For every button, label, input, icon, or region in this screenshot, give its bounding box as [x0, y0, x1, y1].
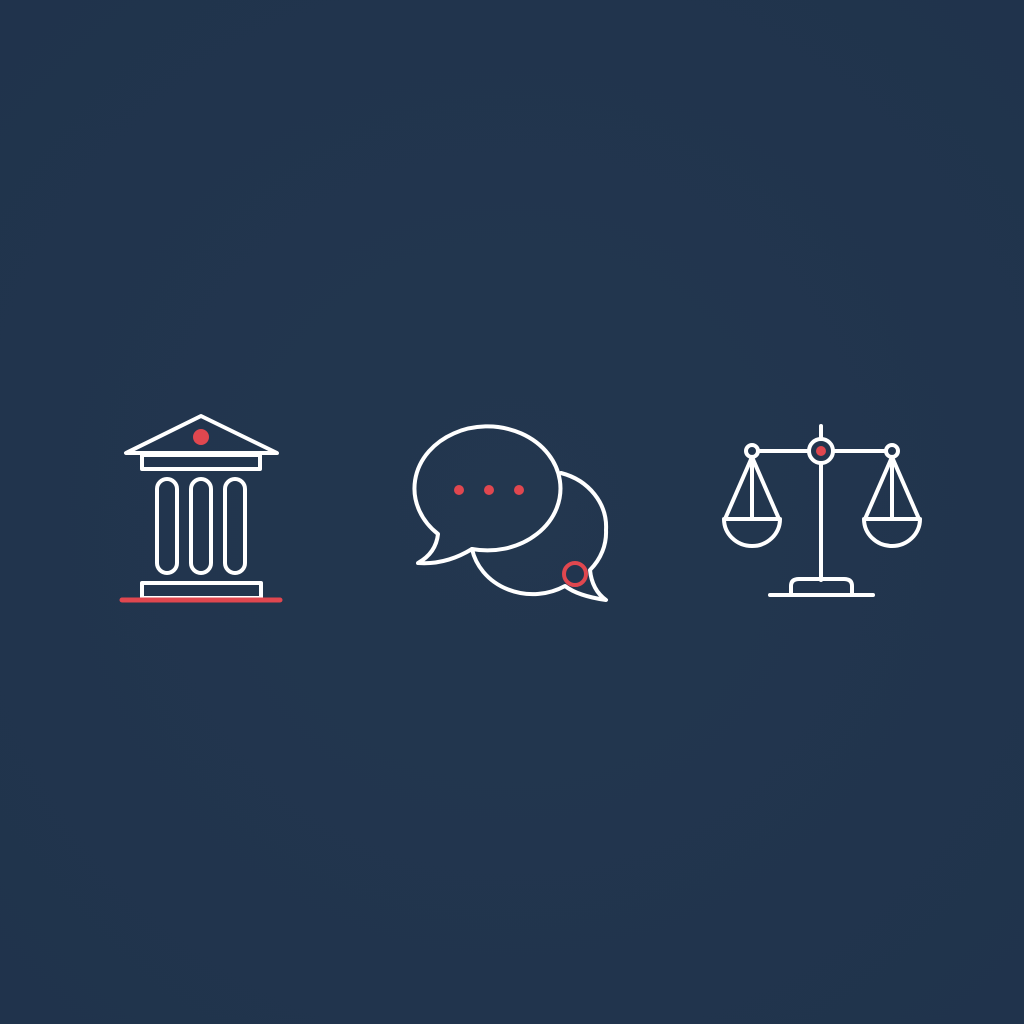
icon: scales of justice [724, 426, 920, 595]
icon: government building [122, 416, 280, 600]
icon: speech bubbles [414, 426, 606, 600]
